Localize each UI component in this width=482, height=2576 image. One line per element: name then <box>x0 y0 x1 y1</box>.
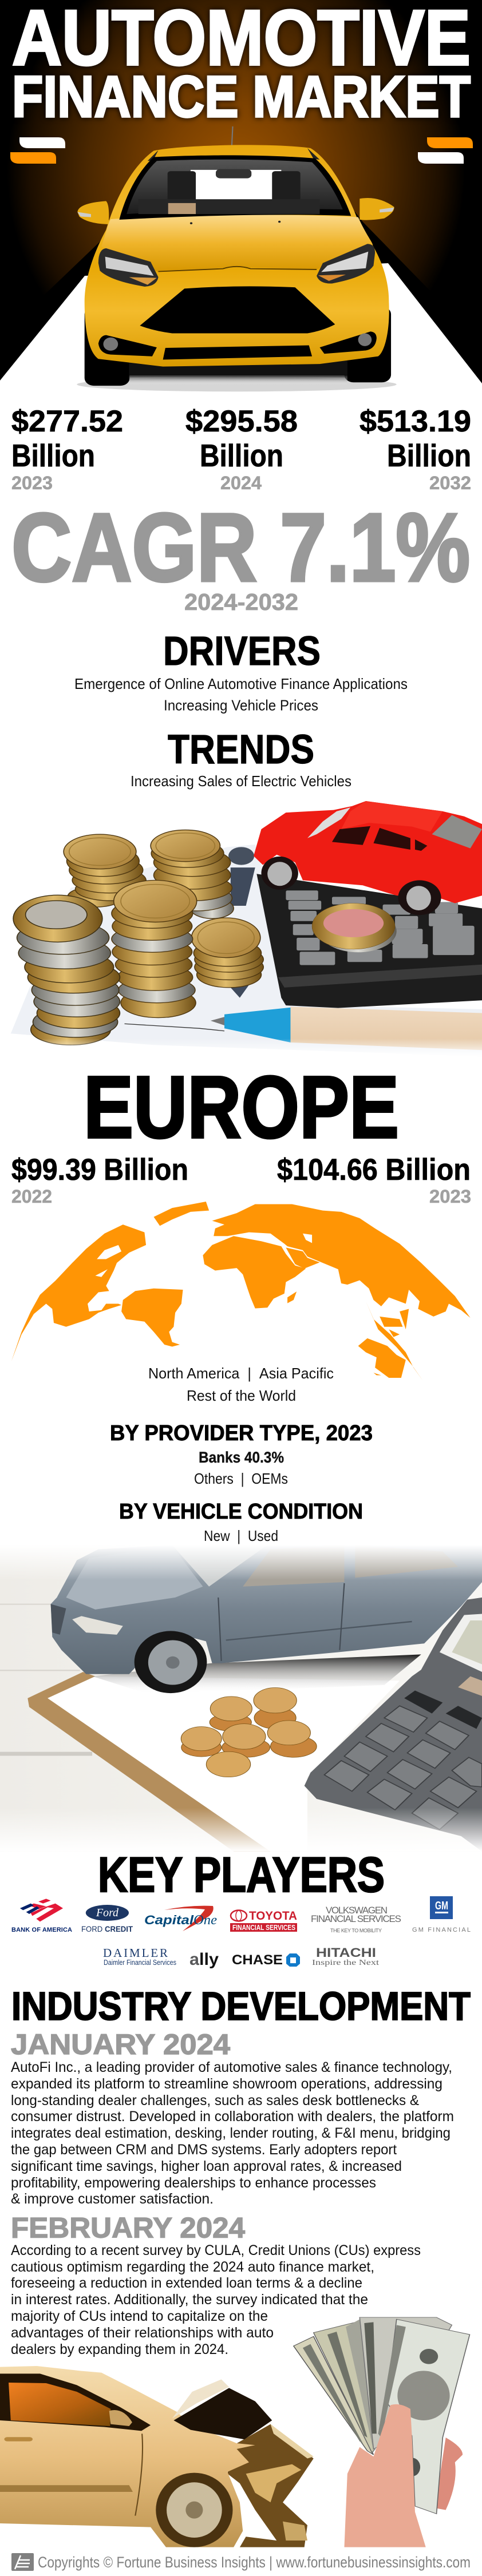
logo: Volkswagen Financial Services: VOLKSWAGEN <box>326 1905 388 1916</box>
stat: 2032: $513.19 <box>359 405 471 438</box>
logo: Ford Credit <box>81 1905 133 1933</box>
stat: 2024 <box>185 405 298 493</box>
Europe 2022 value: $99.39 Billion <box>11 1153 188 1187</box>
logo: Ford Credit: FORD CREDIT <box>81 1924 133 1933</box>
photo: wrecked gold car <box>0 2366 314 2547</box>
speed marks right <box>418 137 473 164</box>
February 2024 entry: cautious optimism regarding the 2024 auto finance market, <box>11 2259 374 2275</box>
logo: Hitachi <box>312 1945 379 1967</box>
title <box>12 0 471 129</box>
logo: ally: ally <box>189 1950 219 1969</box>
February 2024 entry: dealers by expanding them in 2024. <box>11 2341 228 2357</box>
Greenland <box>153 1202 209 1226</box>
wooden table <box>0 1545 482 1852</box>
logo: Volkswagen Financial Services: THE KEY TO MOBILITY <box>330 1928 382 1933</box>
photo: grey car with coins and calculator <box>0 1545 482 1852</box>
logo: Bank of America <box>11 1899 72 1933</box>
logo: Toyota Financial Services <box>230 1909 297 1932</box>
drivers <box>74 629 408 714</box>
logo: Hitachi: HITACHI <box>316 1945 376 1960</box>
paper sheet <box>11 845 482 1056</box>
logo: Hitachi: Inspire the Next <box>312 1959 379 1967</box>
February 2024 entry: foreseeing a reduction in extended loan terms & a decline <box>11 2275 362 2291</box>
trends: Increasing Sales of Electric Vehicles <box>131 772 351 790</box>
January 2024 entry: JANUARY 2024 <box>11 2028 230 2060</box>
stat: 2023: 2023 <box>11 473 53 493</box>
car shadow <box>92 1654 421 1694</box>
by vehicle condition: BY VEHICLE CONDITION <box>119 1500 363 1524</box>
January 2024 entry <box>11 2028 454 2207</box>
yellow car <box>77 126 397 391</box>
stat: 2024: 2024 <box>220 473 262 493</box>
North America <box>11 1224 146 1361</box>
drivers: Emergence of Online Automotive Finance Applications <box>74 675 408 692</box>
clipboard <box>27 1672 400 1852</box>
other regions <box>148 1365 334 1404</box>
South America <box>121 1289 183 1347</box>
logo: Daimler <box>103 1946 176 1967</box>
February 2024 entry: in interest rates. Additionally, the survey indicated that the <box>11 2292 368 2308</box>
trends: TRENDS <box>168 727 314 772</box>
logo: Daimler: DAIMLER <box>103 1946 168 1960</box>
map lakes <box>95 1234 312 1277</box>
logo: Ford Credit: Ford <box>96 1907 119 1919</box>
calculator <box>256 874 482 1008</box>
by provider type: Others | OEMs <box>194 1470 288 1487</box>
February 2024 entry: majority of CUs intend to capitalize on the <box>11 2308 268 2324</box>
hand <box>344 2404 426 2547</box>
by provider type <box>110 1421 373 1487</box>
January 2024 entry: the gap between CRM and DMS systems. Early adopters report <box>11 2142 397 2158</box>
black road shoulders <box>0 212 482 389</box>
logo: Chase: CHASE <box>232 1952 283 1968</box>
by vehicle condition: New | Used <box>204 1527 278 1544</box>
Europe heading: EUROPE <box>84 1058 399 1156</box>
other regions: Rest of the World <box>187 1387 296 1404</box>
logo: Toyota Financial Services: TOYOTA <box>249 1909 297 1923</box>
January 2024 entry: profitability, empowering dealerships to enhance processes <box>11 2175 376 2191</box>
Africa <box>203 1236 306 1309</box>
CAGR: 2024-2032 <box>184 589 298 615</box>
coin stack back left <box>64 834 146 907</box>
coin stack centre <box>112 880 197 1018</box>
drivers: DRIVERS <box>163 629 321 674</box>
speed marks left <box>10 137 65 164</box>
coin stack back right <box>151 830 234 918</box>
Europe 2023 value: 2023 <box>429 1186 471 1207</box>
Arabia <box>286 1247 319 1269</box>
February 2024 entry: advantages of their relationships with auto <box>11 2325 274 2341</box>
logo: GM Financial <box>412 1896 471 1933</box>
photo: hand holding dollar bills <box>294 2317 470 2547</box>
January 2024 entry: consumer distrust. Developed in collaboration with dealers, the platform <box>11 2109 454 2125</box>
stat: 2032 <box>359 405 471 493</box>
February 2024 entry: According to a recent survey by CULA, Credit Unions (CUs) express <box>11 2242 421 2258</box>
January 2024 entry: long-standing dealer challenges, such as sales desk bottlenecks & <box>11 2092 419 2109</box>
world map <box>11 1202 471 1380</box>
logo: GM Financial: GM FINANCIAL <box>412 1927 471 1933</box>
by provider type: BY PROVIDER TYPE, 2023 <box>110 1421 373 1445</box>
other regions: North America | Asia Pacific <box>148 1365 334 1382</box>
logo: Volkswagen Financial Services: FINANCIAL SERVICES <box>311 1913 401 1924</box>
calculator <box>305 1598 482 1852</box>
logo: Capital One <box>144 1906 217 1931</box>
stat: 2023: $277.52 <box>11 405 123 438</box>
drivers: Increasing Vehicle Prices <box>164 697 318 714</box>
Fortune Business Insights logo <box>11 2553 34 2571</box>
grey car <box>51 1545 482 1693</box>
January 2024 entry: expanded its platform to streamline showroom operations, addressing <box>11 2076 443 2092</box>
stat: 2032: 2032 <box>429 473 471 493</box>
key players heading: KEY PLAYERS <box>98 1848 385 1903</box>
Europe 2022 value <box>11 1153 188 1207</box>
January 2024 entry: significant time savings, higher loan approval rates, & increased <box>11 2158 402 2174</box>
logo: GM Financial: GM <box>435 1900 448 1912</box>
logo: Capital One: Capital <box>144 1913 194 1927</box>
fingers behind the bills <box>435 2438 463 2510</box>
coin stack right <box>192 918 263 988</box>
Europe 2022 value: 2022 <box>11 1186 52 1207</box>
euro coin <box>312 903 397 952</box>
stat: 2023: Billion <box>11 438 95 473</box>
January 2024 entry: integrates deal estimation, desking, lender routing, & F&I menu, bridging <box>11 2125 451 2141</box>
hero: black road scene with car <box>0 0 482 403</box>
Europe 2023 value <box>277 1153 471 1207</box>
logo: Toyota Financial Services: FINANCIAL SERVICES <box>232 1923 295 1932</box>
coin pile <box>181 1688 317 1777</box>
stat: 2023 <box>11 405 123 493</box>
Madagascar <box>287 1291 297 1303</box>
January 2024 entry: & improve customer satisfaction. <box>11 2191 214 2207</box>
January 2024 entry: AutoFi Inc., a leading provider of automotive sales & finance technology, <box>11 2059 452 2075</box>
logo: Volkswagen Financial Services <box>311 1905 401 1933</box>
stat: 2024: $295.58 <box>185 405 298 438</box>
photo: coins, calculator, toy car and pen <box>0 801 482 1056</box>
February 2024 entry <box>11 2212 421 2357</box>
coin stack front left <box>13 895 120 1045</box>
by provider type: Banks 40.3% <box>199 1449 284 1466</box>
white road <box>0 263 482 403</box>
orange glow behind the car <box>7 0 465 401</box>
bills <box>294 2317 470 2514</box>
pen <box>124 1006 482 1050</box>
logo: Bank of America: BANK OF AMERICA <box>11 1927 72 1933</box>
trends <box>131 727 351 790</box>
stat: 2024: Billion <box>200 438 283 473</box>
logo: Capital One: One <box>193 1913 217 1928</box>
Australia <box>358 1338 406 1378</box>
red toy car <box>254 801 482 915</box>
South-East Asia islands <box>366 1301 422 1380</box>
February 2024 entry: FEBRUARY 2024 <box>11 2212 245 2244</box>
logo: Daimler: Daimler Financial Services <box>104 1958 176 1967</box>
by vehicle condition <box>119 1500 363 1544</box>
Europe 2023 value: $104.66 Billion <box>277 1153 471 1187</box>
Eurasia <box>212 1204 471 1318</box>
stat: 2032: Billion <box>387 438 471 473</box>
